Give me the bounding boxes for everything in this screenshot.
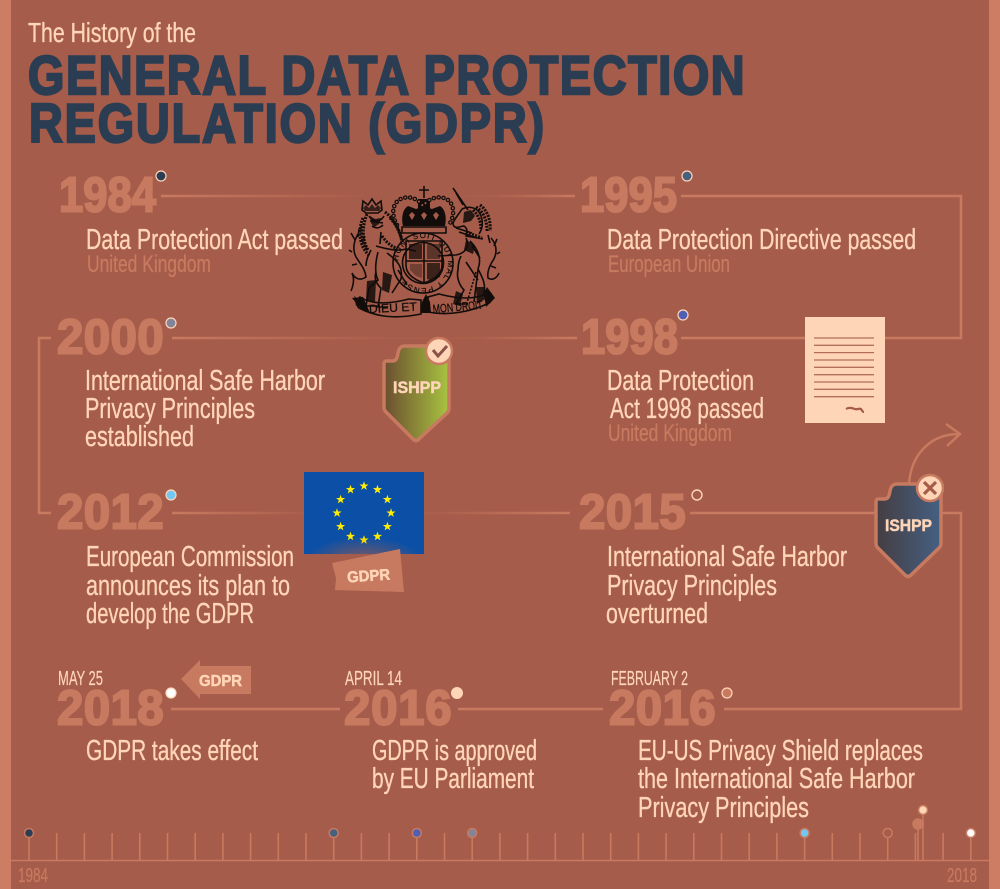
description February 2016: the International Safe Harbor [638, 763, 915, 795]
description 2000: established [85, 421, 194, 453]
event: 1998 [581, 309, 764, 447]
description April 2016 [372, 735, 537, 795]
region 1984: United Kingdom [87, 251, 211, 278]
dot February 2016 [722, 688, 732, 698]
description 2000: International Safe Harbor [85, 365, 325, 397]
dot 2015 [692, 490, 702, 500]
icon: royal coat of arms [348, 186, 500, 318]
date April 14: APRIL 14 [345, 668, 402, 690]
timeline axis and ticks [11, 810, 989, 860]
icon: GDPR arrow: GDPR [199, 673, 242, 690]
overview timeline [11, 806, 989, 887]
description 1998: Act 1998 passed [610, 393, 764, 425]
dot 1984 [156, 171, 166, 181]
timeline start label: 1984 [18, 865, 48, 887]
icon: ISHPP shield with check [384, 338, 452, 440]
icon: GDPR banner: GDPR [347, 566, 391, 586]
event: 2012 [57, 485, 294, 630]
description 2015: Privacy Principles [607, 570, 777, 602]
description 2012: develop the GDPR [86, 598, 254, 630]
description 2018: GDPR takes effect [86, 735, 258, 767]
icon: GDPR banner [332, 549, 404, 592]
motto text right: MON DROIT [432, 298, 484, 316]
event: February 2 2016 [609, 668, 923, 824]
event: 1984 [59, 167, 343, 278]
description 2015: International Safe Harbor [607, 541, 847, 573]
description 2012: announces its plan to [86, 570, 290, 602]
year 1984: 1984 [59, 167, 156, 222]
event: May 25 2018 [57, 668, 258, 767]
icon: EU flag [304, 472, 424, 554]
event: April 14 2016 [344, 668, 537, 795]
main title line 2: REGULATION (GDPR) [29, 92, 544, 154]
description February 2016: Privacy Principles [638, 792, 809, 824]
dot April 2016 [452, 688, 462, 698]
dot 2000 [166, 318, 176, 328]
icon: GDPR arrow [181, 660, 251, 699]
garter and shield: HONI SOIT QUI MAL Y PENSE [393, 232, 454, 294]
dot 1995 [682, 171, 692, 181]
subtitle: The History of the [28, 17, 196, 48]
lion [349, 199, 416, 307]
year 2016 April: 2016 [344, 681, 452, 736]
description 1998 [607, 365, 764, 425]
description 2012 [86, 541, 294, 630]
title block [28, 17, 745, 154]
date May 25: MAY 25 [58, 668, 103, 690]
year 1995: 1995 [580, 167, 677, 222]
timeline end label: 2018 [947, 865, 977, 887]
dot 2018 [166, 688, 176, 698]
left side band [0, 0, 11, 889]
date February 2: FEBRUARY 2 [611, 668, 688, 690]
description 2015 [606, 541, 847, 630]
motto ribbon [352, 287, 495, 317]
event: 2015 [579, 485, 847, 630]
icon: ISHPP shield with check: ISHPP [393, 379, 441, 397]
description 2015: overturned [606, 598, 708, 630]
motto text left: DIEU ET [369, 300, 418, 316]
year 2012: 2012 [57, 485, 164, 540]
icon: ISHPP shield with cross: ISHPP [885, 517, 932, 535]
connector lines between events [39, 196, 961, 709]
description February 2016 [638, 735, 923, 824]
year 2018: 2018 [57, 681, 164, 736]
year 1998: 1998 [581, 309, 678, 364]
description 1984: Data Protection Act passed [86, 224, 343, 256]
dot 1998 [678, 310, 688, 320]
description 2012: European Commission [86, 541, 294, 573]
description 2000 [85, 365, 325, 453]
icon: ISHPP shield with cross [876, 475, 943, 576]
dot 2012 [166, 490, 176, 500]
description 1998: Data Protection [607, 365, 754, 397]
main title line 1: GENERAL DATA PROTECTION [28, 44, 745, 106]
year 2015: 2015 [579, 485, 686, 540]
region 1995: European Union [608, 251, 730, 278]
description April 2016: by EU Parliament [372, 763, 534, 795]
event: 1995 [580, 167, 916, 278]
crown [393, 186, 453, 233]
year 2016 February: 2016 [609, 681, 716, 736]
icon: legal document [805, 317, 885, 423]
right side band [989, 0, 1000, 889]
event: 2000 [57, 310, 325, 453]
arrow: out of timeline [909, 424, 960, 484]
region 1998: United Kingdom [608, 420, 732, 447]
unicorn [438, 188, 500, 306]
description 2000: Privacy Principles [85, 393, 255, 425]
timeline markers [24, 806, 975, 838]
description April 2016: GDPR is approved [372, 735, 537, 767]
year 2000: 2000 [57, 310, 164, 365]
